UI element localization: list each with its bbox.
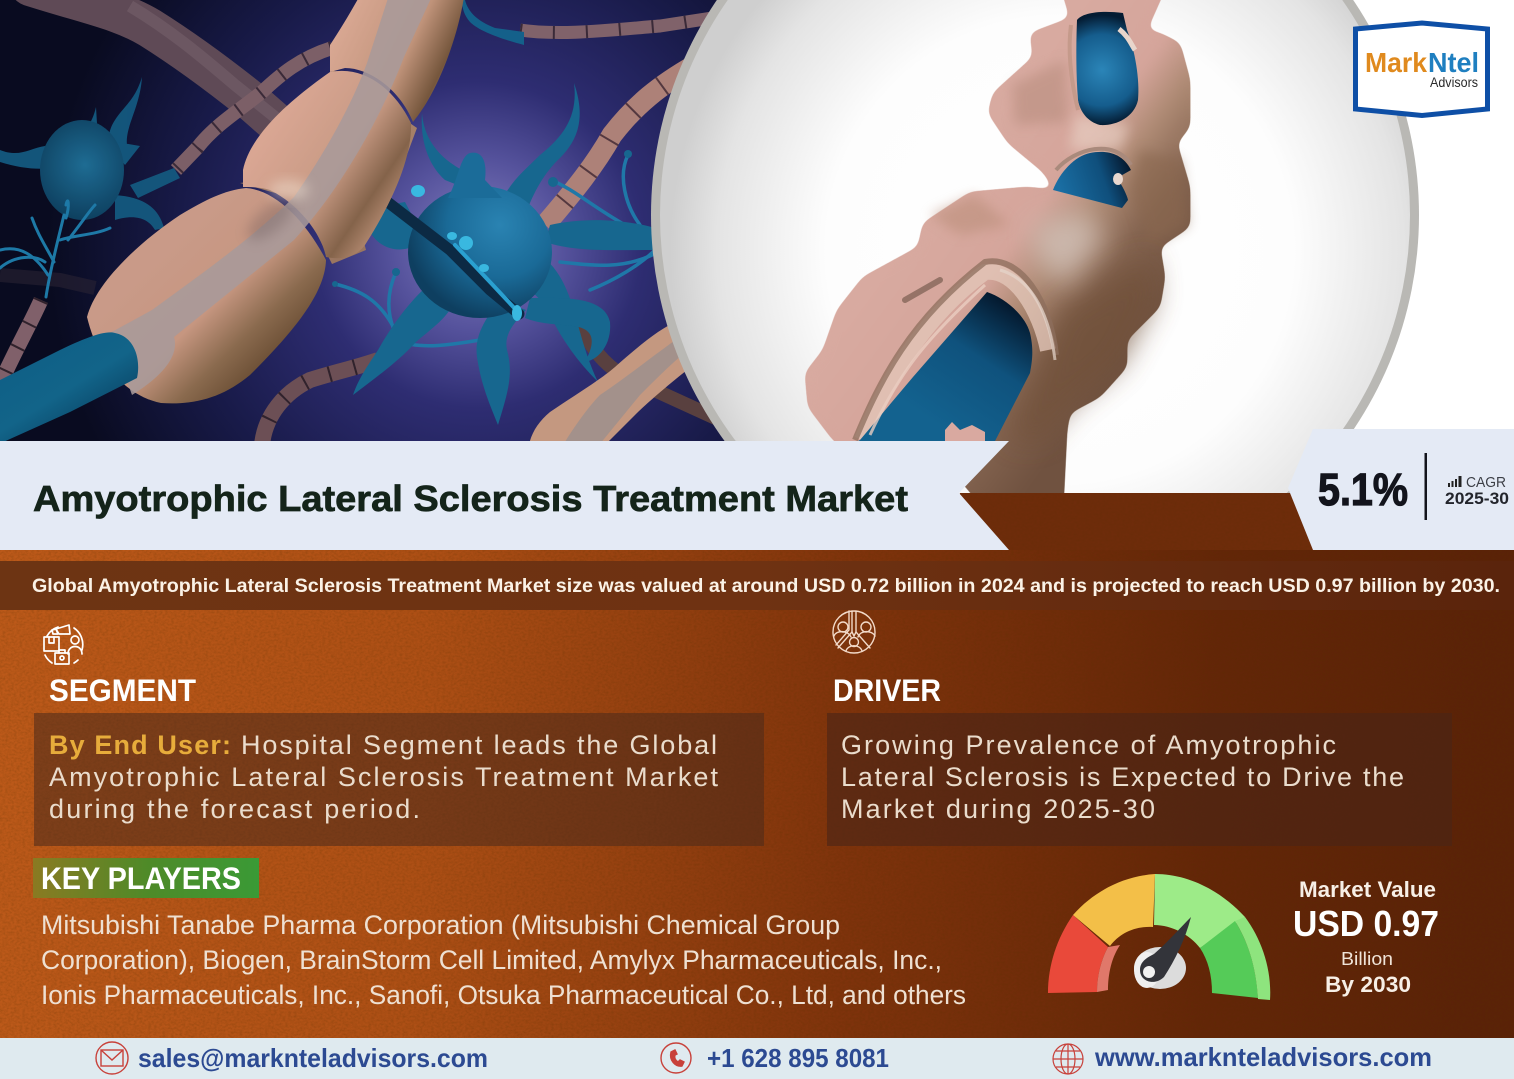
thin beaded fibers xyxy=(176,48,332,170)
CAGR period: 2025-30 xyxy=(1445,490,1509,508)
phone: +1 628 895 8081 xyxy=(707,1043,889,1073)
blue axon core xyxy=(0,332,138,448)
lower right small fiber xyxy=(530,326,684,441)
top teal process xyxy=(462,0,524,45)
heading: segment: SEGMENT xyxy=(49,672,196,708)
disc background with grey ring xyxy=(651,0,1419,599)
icon: phone xyxy=(661,1043,691,1073)
market value: Market Value xyxy=(1299,877,1436,902)
lower large lumen xyxy=(850,292,1032,445)
market value: Billion xyxy=(1341,949,1393,969)
large dark fiber top left xyxy=(0,0,720,445)
segment text: Amyotrophic Lateral Sclerosis Treatment Market xyxy=(49,762,718,792)
website: www.marknteladvisors.com xyxy=(1094,1042,1432,1072)
email: sales@marknteladvisors.com xyxy=(138,1043,488,1073)
axon strand with cyan highlight xyxy=(385,200,519,314)
middle lumen xyxy=(1053,152,1131,208)
logo: MarkNtel Advisors: Advisors xyxy=(1430,75,1478,90)
CAGR value: 5.1% xyxy=(1318,464,1408,515)
CAGR badge xyxy=(1288,429,1514,550)
CAGR label: CAGR xyxy=(1466,474,1506,491)
illustration: dissected myelin sheath xyxy=(805,0,1190,510)
icon: small bar chart xyxy=(1448,476,1462,487)
central neuron xyxy=(332,83,655,425)
lumen folds xyxy=(862,272,1048,440)
logo: MarkNtel Advisors xyxy=(1356,23,1488,116)
panel: driver description xyxy=(827,713,1452,846)
footer contact bar xyxy=(0,1038,1514,1079)
icon: segment xyxy=(44,625,83,664)
fiber inner band xyxy=(110,0,434,395)
market value: USD 0.97 xyxy=(1293,903,1439,944)
tentacles xyxy=(422,114,460,184)
segment text: Hospital Segment leads the Global xyxy=(241,730,717,760)
segment text xyxy=(49,730,718,824)
key players list: Mitsubishi Tanabe Pharma Corporation (Mitsubishi Chemical Group xyxy=(41,910,840,940)
heading: key players: KEY PLAYERS xyxy=(41,860,241,896)
gauge needle xyxy=(1140,917,1191,982)
gauge dial xyxy=(1134,947,1186,989)
gauge chart xyxy=(1048,874,1270,1000)
logo: MarkNtel Advisors: Mark xyxy=(1365,47,1427,78)
market size summary band: Global Amyotrophic Lateral Sclerosis Treatment Market size was valued at around USD 0.72 billion in 2024 and is projected to reach USD 0.97 billion by 2030. xyxy=(32,575,1500,597)
left background neuron xyxy=(0,77,180,297)
key players list: Ionis Pharmaceuticals, Inc., Sanofi, Otsuka Pharmaceutical Co., Ltd, and others xyxy=(41,980,966,1010)
panel: driver description: Growing Prevalence of Amyotrophic xyxy=(841,730,1336,760)
organ shading xyxy=(1010,255,1155,440)
icon: driver xyxy=(833,611,875,653)
panel: driver description: Lateral Sclerosis is Expected to Drive the xyxy=(841,762,1404,792)
brown content panel background xyxy=(0,493,1514,1038)
segment label: By End User: xyxy=(49,730,231,760)
market value xyxy=(1293,877,1439,997)
icon: email xyxy=(96,1042,128,1074)
market size summary band xyxy=(0,561,1514,610)
key players list: Corporation), Biogen, BrainStorm Cell Limited, Amylyx Pharmaceuticals, Inc., xyxy=(41,945,942,975)
segment text: during the forecast period. xyxy=(49,794,420,824)
icon: globe xyxy=(1053,1044,1083,1074)
hero illustration: nerve fibers and neurons xyxy=(0,0,760,450)
market value: By 2030 xyxy=(1325,972,1411,997)
upper lumen xyxy=(1076,12,1138,125)
key players list xyxy=(41,910,966,1010)
large myelinated fiber segments xyxy=(0,0,465,448)
panel: driver description: Market during 2025-30 xyxy=(841,794,1155,824)
title: Amyotrophic Lateral Sclerosis Treatment Market xyxy=(33,478,908,519)
panel: segment description xyxy=(34,713,764,846)
heading: driver: DRIVER xyxy=(833,672,941,708)
logo: MarkNtel Advisors: Ntel xyxy=(1428,47,1479,78)
title ribbon xyxy=(0,441,1009,550)
thin dendrites xyxy=(335,155,655,346)
